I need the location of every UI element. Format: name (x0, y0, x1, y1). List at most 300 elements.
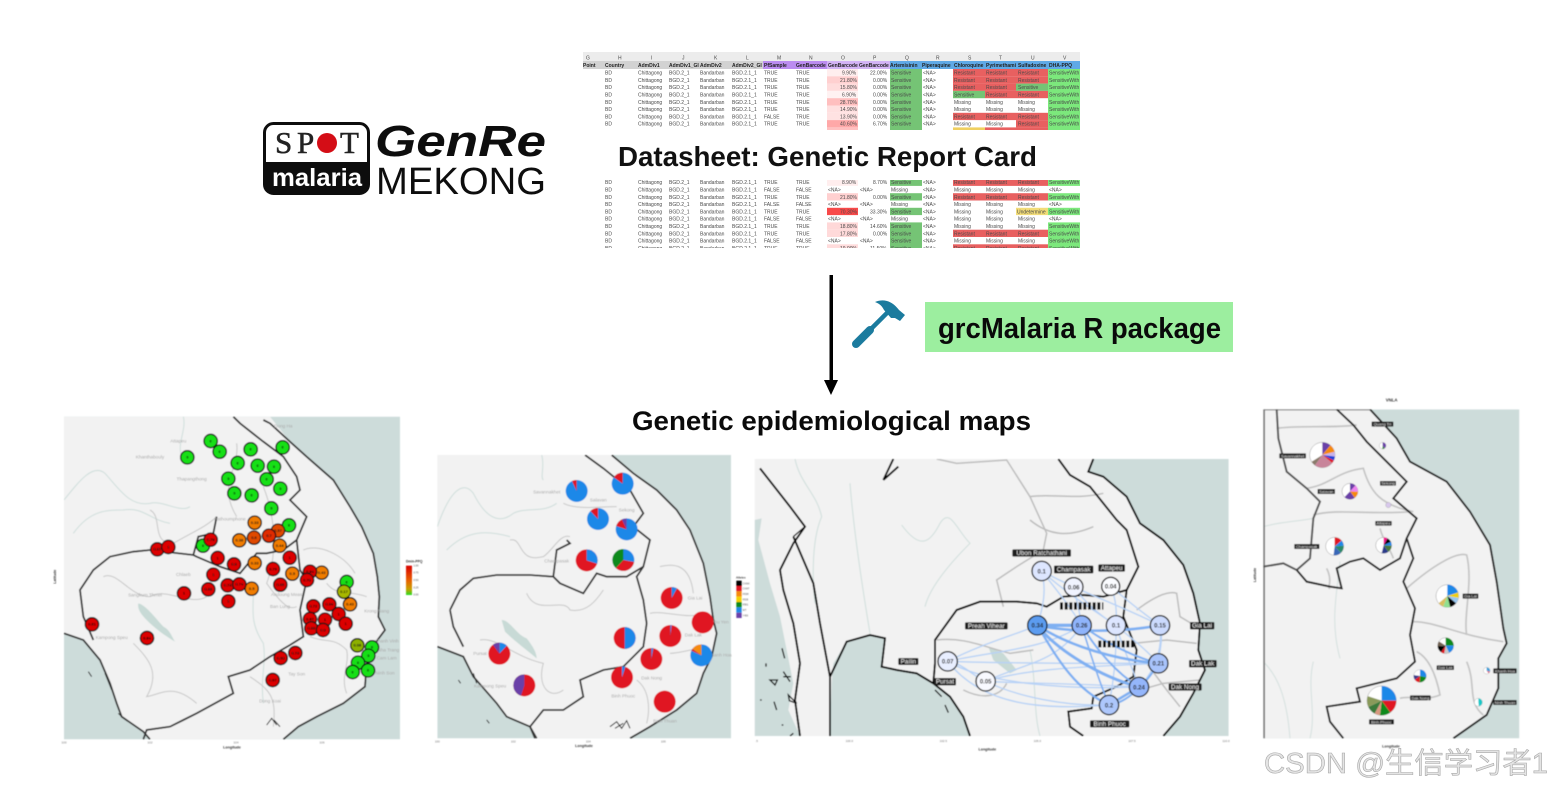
legend: Dmin-PPQ (406, 560, 423, 564)
marker values: 0.43 (346, 602, 355, 607)
datasheet excerpt: top rows: S (968, 56, 972, 62)
node labels: Dak Lak (1191, 661, 1215, 668)
datasheet excerpt: bottom rows: BD (605, 209, 612, 215)
legend: 0.25 (413, 585, 419, 589)
datasheet excerpt: top rows: SensitiveWith (1049, 85, 1080, 91)
place names: Ninh Son (375, 671, 395, 676)
datasheet excerpt: top rows: Resistant (986, 92, 1007, 98)
datasheet excerpt: bottom rows: Bandarban (700, 202, 725, 208)
datasheet excerpt: top rows: AdmDiv2_GI (732, 63, 762, 69)
arrow: datasheet to maps (824, 275, 838, 395)
datasheet excerpt: top rows: TRUE (796, 71, 810, 77)
province labels: Khanh Hoa (1495, 668, 1516, 673)
datasheet excerpt: top rows: Resistant (1018, 92, 1039, 98)
datasheet excerpt: bottom rows: Missing (986, 209, 1003, 215)
datasheet excerpt: bottom rows: Missing (1018, 202, 1035, 208)
datasheet excerpt: top rows: Missing (1018, 107, 1035, 113)
place names: Kampong Speu (474, 683, 506, 688)
marker values: 0.76 (207, 537, 215, 542)
datasheet excerpt: top rows: Chittagong (638, 107, 662, 113)
marker values: 1 (183, 591, 186, 596)
datasheet excerpt: bottom rows: Missing (986, 224, 1003, 230)
marker values: 0 (367, 668, 370, 673)
legend: CVIAK (743, 582, 750, 585)
panel: haplotype diversity map (1253, 398, 1519, 749)
legend: CVIAT (743, 588, 750, 591)
axes (435, 739, 666, 748)
datasheet excerpt: top rows: 0.00% (873, 78, 888, 84)
axes: 100 (62, 740, 67, 744)
province labels: Salavan (1319, 489, 1334, 494)
datasheet excerpt: top rows: SensitiveWith (1049, 78, 1080, 84)
node labels (898, 549, 1217, 728)
datasheet excerpt: top rows: Resistant (954, 78, 975, 84)
datasheet excerpt: bottom rows: Missing (954, 224, 971, 230)
marker values: 0.33 (251, 520, 259, 525)
datasheet excerpt: top rows: DHA-PPQ (1049, 63, 1072, 69)
province labels: Savannakhet (1281, 453, 1305, 458)
datasheet excerpt: bottom rows: BGD.2.1_1 (732, 217, 757, 223)
axes: 102 (511, 739, 516, 743)
datasheet excerpt: top rows: H (618, 56, 622, 62)
marker values: 0.74 (235, 582, 244, 587)
datasheet excerpt: top rows: Sensitive (891, 92, 912, 98)
place names (473, 489, 732, 723)
place names: Dong Ha (274, 423, 293, 428)
marker values: 0.57 (274, 528, 283, 533)
datasheet excerpt: bottom rows: Chittagong (638, 231, 662, 237)
datasheet excerpt: top rows: TRUE (796, 114, 810, 120)
datasheet excerpt: bottom rows: Missing (986, 217, 1003, 223)
datasheet excerpt: top rows: Sensitive (891, 114, 912, 120)
datasheet excerpt: bottom rows: <NA> (923, 188, 936, 194)
datasheet excerpt: bottom rows: BGD.2.1_1 (732, 180, 757, 186)
datasheet excerpt: top rows: Resistant (1018, 71, 1039, 77)
datasheet excerpt: bottom rows: Chittagong (638, 180, 662, 186)
datasheet excerpt: bottom rows: SensitiveWith (1049, 224, 1080, 230)
datasheet excerpt: bottom rows: Missing (986, 188, 1003, 194)
datasheet excerpt: bottom rows: 11.50% (870, 246, 887, 252)
node values: 0.24 (1133, 685, 1145, 691)
node values: 0.04 (1105, 585, 1117, 591)
datasheet excerpt: top rows: SensitiveWith (1049, 92, 1080, 98)
datasheet excerpt: bottom rows: BD (605, 217, 612, 223)
place names: Binh Phuoc (611, 693, 636, 698)
datasheet excerpt: top rows: Missing (986, 107, 1003, 113)
datasheet excerpt: top rows: BGD.2.1_1 (732, 122, 757, 128)
datasheet excerpt: bottom rows: Sensitive (891, 224, 912, 230)
datasheet excerpt: bottom rows: Chittagong (638, 246, 662, 252)
heading: Genetic epidemiological maps: Genetic epidemiological maps (632, 406, 1031, 436)
axes: Longitude (978, 747, 996, 751)
legend: Alleles (736, 575, 746, 579)
label: grcMalaria R package: grcMalaria R package (938, 313, 1221, 345)
datasheet excerpt: bottom rows: Missing (1018, 217, 1035, 223)
datasheet excerpt: top rows: TRUE (796, 122, 810, 128)
marker values: 1 (345, 621, 348, 626)
datasheet excerpt: bottom rows: Sensitive (891, 195, 912, 201)
pies (488, 473, 714, 713)
datasheet excerpt: bottom rows: Resistant (986, 246, 1007, 252)
datasheet excerpt: top rows: Chittagong (638, 85, 662, 91)
datasheet excerpt: top rows: AdmDiv1_GI (669, 63, 699, 69)
datasheet excerpt: top rows: Missing (954, 107, 971, 113)
datasheet excerpt: top rows: BGD.2.1_1 (732, 100, 757, 106)
place names: Sangkum Thmei (128, 592, 162, 597)
datasheet heading: Datasheet: Genetic Report Card (618, 141, 1037, 172)
datasheet excerpt: bottom rows: BGD.2_1 (669, 180, 690, 186)
legend (736, 575, 750, 618)
datasheet excerpt: bottom rows: <NA> (923, 217, 936, 223)
datasheet excerpt: bottom rows: <NA> (923, 180, 936, 186)
province labels: Binh Phuoc (1371, 719, 1392, 724)
node labels: Gia Lai (1192, 623, 1212, 630)
datasheet excerpt: top rows: Resistant (954, 114, 975, 120)
datasheet excerpt: top rows: 13.90% (840, 114, 858, 120)
datasheet excerpt: top rows: Bandarban (700, 107, 725, 113)
marker values: 0.9 (320, 627, 327, 632)
legend: R561 (743, 605, 749, 607)
place names: Cam Lam (377, 655, 397, 660)
marker values: 0.6 (251, 535, 258, 540)
marker values: 0.79 (291, 650, 300, 655)
datasheet excerpt: bottom rows: BGD.2_1 (669, 202, 690, 208)
datasheet excerpt: top rows: BGD.2.1_1 (732, 71, 757, 77)
datasheet excerpt: bottom rows: FALSE (796, 188, 812, 194)
datasheet excerpt: bottom rows: <NA> (828, 202, 841, 208)
datasheet excerpt: bottom rows: BGD.2.1_1 (732, 195, 757, 201)
datasheet excerpt: bottom rows: <NA> (860, 217, 873, 223)
datasheet excerpt: top rows: TRUE (796, 92, 810, 98)
node labels: Pursat (936, 679, 954, 686)
datasheet excerpt: bottom rows: Resistant (1018, 246, 1039, 252)
datasheet excerpt: top rows: 14.90% (840, 107, 858, 113)
datasheet excerpt: bottom rows: Bandarban (700, 239, 725, 245)
datasheet excerpt: top rows: Resistant (1018, 114, 1039, 120)
datasheet excerpt: bottom rows: SensitiveWith (1049, 209, 1080, 215)
marker values: 1 (324, 617, 327, 622)
marker values: 0.97 (269, 677, 277, 682)
marker values: 1 (338, 611, 341, 616)
datasheet excerpt: bottom rows: TRUE (764, 246, 778, 252)
datasheet excerpt: bottom rows: Resistant (1018, 180, 1039, 186)
datasheet excerpt: bottom rows: <NA> (923, 195, 936, 201)
datasheet excerpt: top rows: 0.00% (873, 85, 888, 91)
logo: SpotMalaria GenRe Mekong (264, 117, 546, 203)
place names: Salavan (590, 497, 607, 502)
marker values: 0.84 (325, 602, 334, 607)
datasheet excerpt: top rows: Bandarban (700, 114, 725, 120)
datasheet excerpt: top rows: Missing (954, 122, 971, 128)
node values: 0.2 (1105, 703, 1114, 709)
province labels: Dak Lak (1438, 665, 1453, 670)
datasheet excerpt: bottom rows: 8.70% (873, 180, 888, 186)
datasheet excerpt: top rows: TRUE (764, 78, 778, 84)
province labels: Sekong (1381, 481, 1395, 486)
marker values: 0 (367, 653, 370, 658)
datasheet excerpt: top rows: AdmDiv2 (700, 63, 722, 69)
place names (96, 423, 400, 704)
datasheet excerpt: bottom rows: BGD.2_1 (669, 239, 690, 245)
datasheet excerpt: bottom rows: BGD.2.1_1 (732, 246, 757, 252)
datasheet excerpt: bottom rows: <NA> (860, 202, 873, 208)
datasheet excerpt: bottom rows: TRUE (764, 195, 778, 201)
province labels: Champasak (1296, 544, 1317, 549)
datasheet excerpt: top rows: 6.90% (842, 92, 857, 98)
place names: Thapangthong (177, 477, 207, 482)
datasheet excerpt: bottom rows: Missing (1018, 224, 1035, 230)
datasheet excerpt: top rows: GenBarcode (859, 63, 889, 69)
datasheet excerpt: top rows: Resistant (1018, 78, 1039, 84)
datasheet excerpt: bottom rows: <NA> (1049, 188, 1062, 194)
datasheet excerpt: top rows: BD (605, 100, 612, 106)
datasheet excerpt: top rows: Resistant (1018, 122, 1039, 128)
node values: 0.06 (1068, 585, 1080, 591)
datasheet excerpt: top rows: BD (605, 92, 612, 98)
datasheet excerpt: top rows: AdmDiv1 (638, 63, 660, 69)
datasheet excerpt: top rows: 40.60% (840, 122, 858, 128)
datasheet excerpt: top rows: Resistant (986, 85, 1007, 91)
panel: map of DHA-PPQ resistance prevalence (53, 417, 423, 749)
datasheet excerpt: bottom rows: FALSE (796, 239, 812, 245)
datasheet excerpt: bottom rows: FALSE (796, 202, 812, 208)
node values: 0.26 (1076, 624, 1088, 630)
datasheet excerpt: bottom rows: Missing (954, 217, 971, 223)
datasheet excerpt: bottom rows: Bandarban (700, 217, 725, 223)
datasheet excerpt: bottom rows: Sensitive (891, 209, 912, 215)
axes: Longitude (223, 745, 241, 749)
datasheet excerpt: top rows: TRUE (764, 85, 778, 91)
datasheet excerpt: bottom rows: Bandarban (700, 246, 725, 252)
node values: 0.15 (1154, 624, 1166, 630)
datasheet excerpt: bottom rows: BGD.2.1_1 (732, 202, 757, 208)
marker values: 0.84 (306, 569, 315, 574)
legend: R539 (743, 599, 749, 601)
datasheet excerpt: top rows: TRUE (796, 85, 810, 91)
datasheet excerpt: top rows: 9.90% (842, 71, 857, 77)
datasheet excerpt: top rows: BGD.2_1 (669, 85, 690, 91)
datasheet excerpt: top rows: I (651, 56, 652, 62)
panel: connectivity network map (755, 459, 1230, 751)
datasheet excerpt: top rows: <NA> (923, 78, 936, 84)
marker values: 0.84 (143, 635, 152, 640)
datasheet excerpt: top rows: BGD.2.1_1 (732, 85, 757, 91)
datasheet excerpt: top rows: SensitiveWith (1049, 100, 1080, 106)
datasheet excerpt: top rows: Point (583, 63, 596, 69)
datasheet excerpt: bottom rows: 0.00% (873, 231, 888, 237)
datasheet excerpt: bottom rows: <NA> (828, 188, 841, 194)
marker values: 0 (371, 645, 374, 650)
place names: Champasak (544, 559, 570, 564)
marker values: 0.43 (318, 570, 326, 575)
datasheet excerpt: top rows: Sensitive (891, 78, 912, 84)
marker values: 0 (270, 506, 273, 511)
datasheet excerpt: top rows: TRUE (764, 122, 778, 128)
datasheet excerpt: bottom rows: Bandarban (700, 188, 725, 194)
marker values: 0.7 (266, 533, 273, 538)
datasheet excerpt: bottom rows: BGD.2.1_1 (732, 239, 757, 245)
place names: Dak Nong (641, 675, 662, 680)
datasheet excerpt: bottom rows: 33.30% (870, 209, 888, 215)
node labels: Binh Phuoc (1093, 721, 1126, 728)
datasheet excerpt: top rows: G (586, 56, 590, 62)
datasheet excerpt: bottom rows: TRUE (796, 195, 810, 201)
datasheet excerpt: top rows: BD (605, 85, 612, 91)
marker values: 0 (237, 460, 240, 465)
datasheet excerpt: top rows: Sensitive (1018, 85, 1039, 91)
datasheet excerpt: top rows: TRUE (796, 100, 810, 106)
datasheet excerpt: top rows: TRUE (796, 78, 810, 84)
legend: Y493 (743, 615, 749, 617)
marker values: 0 (186, 455, 189, 460)
datasheet excerpt: top rows: <NA> (923, 100, 936, 106)
datasheet excerpt: bottom rows: Resistant (1018, 195, 1039, 201)
marker values: 0 (233, 491, 236, 496)
datasheet excerpt: top rows: PfSample (764, 63, 787, 69)
datasheet excerpt: bottom rows: Sensitive (891, 246, 912, 252)
datasheet excerpt: top rows: TRUE (764, 107, 778, 113)
datasheet excerpt: bottom rows: Resistant (986, 231, 1007, 237)
datasheet excerpt: top rows: BGD.2_1 (669, 107, 690, 113)
marker values: 0.17 (340, 589, 349, 594)
datasheet excerpt: top rows: N (809, 56, 813, 62)
node values: 0.05 (980, 680, 992, 686)
datasheet excerpt: top rows: SensitiveWith (1049, 107, 1080, 113)
datasheet excerpt: top rows: Chittagong (638, 92, 662, 98)
node values (942, 569, 1166, 709)
axes: 106 (320, 740, 325, 744)
datasheet excerpt: bottom rows: BD (605, 246, 612, 252)
datasheet excerpt: top rows: TRUE (764, 71, 778, 77)
datasheet excerpt: bottom rows: 70.30% (840, 209, 858, 215)
province labels (1279, 422, 1517, 724)
datasheet excerpt: bottom rows: Missing (891, 202, 908, 208)
datasheet excerpt: bottom rows: Resistant (954, 231, 975, 237)
datasheet excerpt: top rows: Bandarban (700, 122, 725, 128)
datasheet excerpt: bottom rows: BGD.2_1 (669, 195, 690, 201)
datasheet excerpt: top rows: SensitiveWith (1049, 122, 1080, 128)
datasheet excerpt: bottom rows: Resistant (954, 180, 975, 186)
axes: Latitude (53, 570, 57, 584)
logo: SpotMalaria GenRe Mekong: S (275, 125, 292, 160)
marker values: 0.83 (277, 655, 285, 660)
datasheet excerpt: bottom rows: FALSE (764, 217, 780, 223)
axes: 104 (234, 740, 239, 744)
axes: 107.5 (1128, 739, 1136, 743)
datasheet excerpt: bottom rows: 8.90% (842, 180, 857, 186)
datasheet excerpt: top rows: TRUE (764, 100, 778, 106)
marker values: 0.86 (276, 582, 285, 587)
datasheet excerpt: bottom rows: TRUE (796, 180, 810, 186)
datasheet excerpt: bottom rows: Chittagong (638, 217, 662, 223)
marker values: 0.76 (303, 577, 312, 582)
axes: 110.0 (1222, 739, 1230, 743)
datasheet excerpt: top rows: BGD.2.1_1 (732, 78, 757, 84)
datasheet excerpt: bottom rows: Missing (986, 202, 1003, 208)
marker values: 0.87 (306, 616, 315, 621)
place names: Andoung Meas (271, 592, 303, 597)
datasheet excerpt: top rows: 21.80% (840, 78, 858, 84)
place names: Krong Nang (364, 609, 389, 614)
marker values: 0 (219, 449, 222, 454)
datasheet excerpt: bottom rows: Sensitive (891, 231, 912, 237)
datasheet excerpt: top rows (583, 52, 1080, 131)
datasheet excerpt: bottom rows: TRUE (764, 209, 778, 215)
place names: Gia Lai (688, 595, 702, 600)
datasheet excerpt: bottom rows: Resistant (954, 195, 975, 201)
marker values: 0 (346, 579, 349, 584)
datasheet excerpt: bottom rows: BD (605, 224, 612, 230)
datasheet excerpt: top rows: <NA> (923, 114, 936, 120)
datasheet excerpt: top rows: Missing (986, 122, 1003, 128)
datasheet excerpt: bottom rows: 0.00% (873, 195, 888, 201)
datasheet excerpt: bottom rows (605, 179, 1080, 252)
pies (1310, 442, 1490, 715)
place names: Nha Trang (377, 647, 400, 652)
datasheet excerpt: bottom rows: <NA> (828, 239, 841, 245)
marker values: 0.91 (88, 622, 97, 627)
datasheet excerpt: bottom rows: 17.80% (840, 231, 858, 237)
province labels: Dak Nong (1411, 695, 1429, 700)
place names: Sekong (619, 508, 635, 513)
icon: hammer (856, 300, 905, 344)
datasheet excerpt: bottom rows: TRUE (764, 231, 778, 237)
datasheet excerpt: bottom rows: <NA> (923, 231, 936, 237)
marker values: 0.75 (224, 583, 232, 588)
place names: Khanh Hoa (708, 652, 732, 657)
place names: Khanthabouly (136, 455, 165, 460)
datasheet excerpt: top rows: 22.00% (870, 71, 888, 77)
datasheet excerpt: bottom rows: BD (605, 239, 612, 245)
datasheet excerpt: bottom rows: SensitiveWith (1049, 239, 1080, 245)
marker values: 0.33 (251, 560, 259, 565)
datasheet excerpt: bottom rows: <NA> (1049, 202, 1062, 208)
legend: 0.75 (413, 571, 419, 575)
datasheet excerpt: bottom rows: BGD.2_1 (669, 217, 690, 223)
datasheet excerpt: bottom rows: Chittagong (638, 209, 662, 215)
marker values: 1 (217, 555, 220, 560)
legend: 1.00 (413, 564, 419, 568)
datasheet excerpt: top rows: K (714, 56, 718, 62)
datasheet excerpt: top rows: Sensitive (954, 92, 975, 98)
datasheet excerpt: bottom rows: FALSE (764, 188, 780, 194)
datasheet excerpt: top rows: BD (605, 122, 612, 128)
datasheet excerpt: top rows: SensitiveWith (1049, 114, 1080, 120)
marker values: 0 (227, 476, 230, 481)
legend: 0.50 (413, 578, 419, 582)
datasheet excerpt: top rows: BGD.2_1 (669, 114, 690, 120)
logo: SpotMalaria GenRe Mekong: P (297, 125, 314, 160)
datasheet excerpt: bottom rows: BD (605, 188, 612, 194)
datasheet excerpt: bottom rows: BGD.2.1_1 (732, 188, 757, 194)
axes: 105.0 (1034, 739, 1041, 743)
place names: Khanh Vinh (375, 639, 399, 644)
marker values: 0 (273, 464, 276, 469)
node labels: Ubon Ratchathani (1016, 550, 1067, 557)
datasheet excerpt: bottom rows: TRUE (796, 246, 810, 252)
label: grcMalaria R package (925, 302, 1233, 352)
datasheet excerpt: top rows: BD (605, 107, 612, 113)
datasheet excerpt: top rows: Sensitive (891, 107, 912, 113)
datasheet excerpt: top rows: 0.00% (873, 92, 888, 98)
province labels: Attapeu (1376, 521, 1390, 526)
marker values: 1 (227, 599, 230, 604)
place names: Savannakhet (533, 489, 561, 494)
datasheet excerpt: bottom rows: Missing (954, 202, 971, 208)
datasheet excerpt: top rows: 28.70% (840, 100, 858, 106)
node values: 0.21 (1153, 662, 1165, 668)
datasheet excerpt: top rows: <NA> (923, 122, 936, 128)
